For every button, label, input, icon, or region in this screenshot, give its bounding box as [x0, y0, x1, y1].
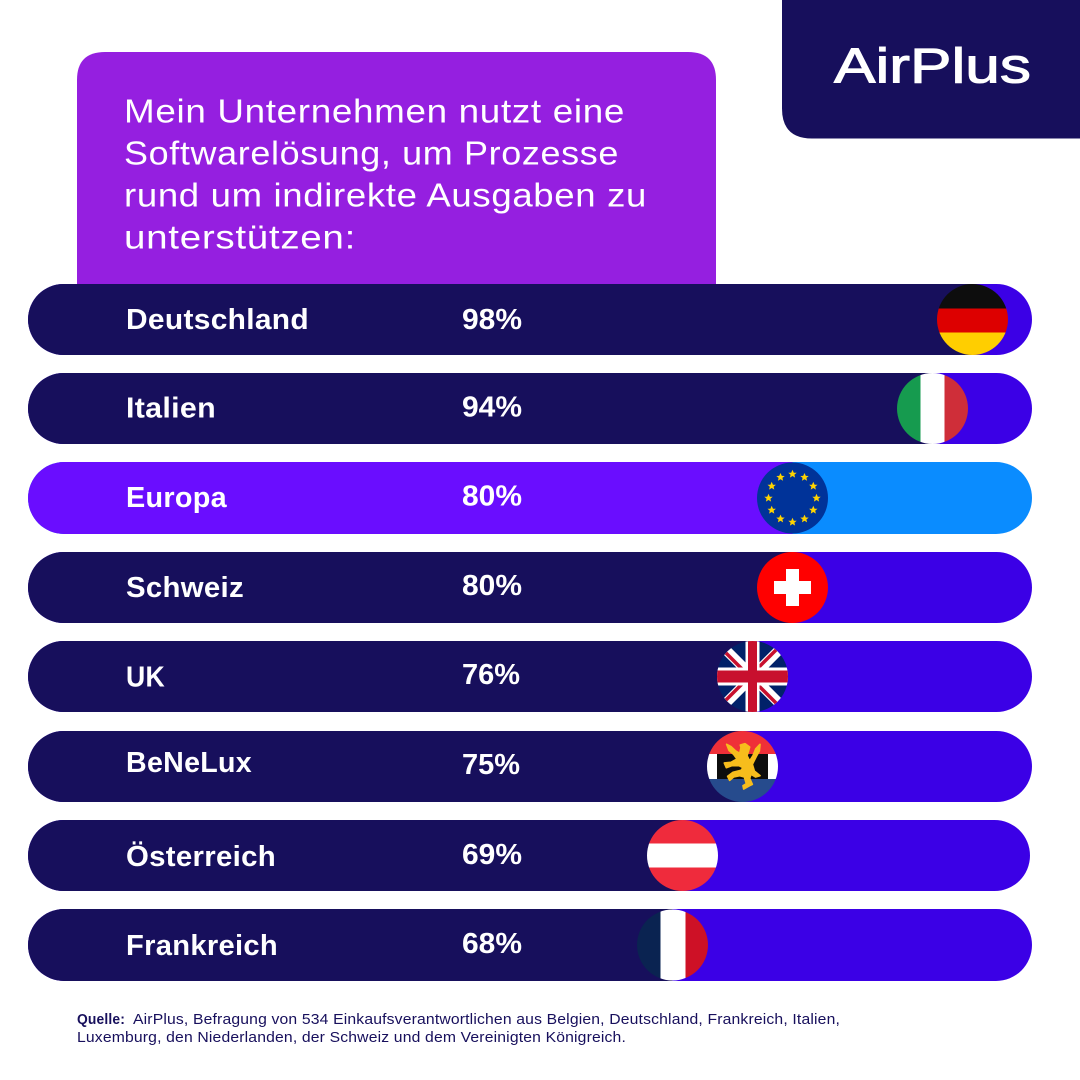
source note: Quelle:: [77, 1012, 125, 1028]
row: Österreich 69%: 69%: [462, 839, 522, 871]
row: UK 76%: [28, 640, 1032, 712]
source note: Luxemburg, den Niederlanden, der Schweiz und dem Vereinigten Königreich.: [77, 1030, 626, 1046]
row: Deutschland 98%: Deutschland: [126, 304, 309, 336]
title panel: [77, 52, 716, 284]
row: Frankreich 68%: 68%: [462, 928, 522, 960]
row: Schweiz 80%: [28, 552, 1032, 623]
title text: unterstützen:: [124, 218, 356, 256]
row: Frankreich 68%: Frankreich: [126, 930, 278, 962]
icon: UK flag: [716, 640, 788, 712]
icon: Italian flag: [896, 372, 968, 444]
row: BeNeLux 75%: [28, 730, 1032, 803]
title text: Softwarelösung, um Prozesse: [124, 134, 619, 172]
row: Österreich 69%: Österreich: [126, 840, 276, 873]
row: Italien 94%: [28, 372, 1032, 444]
title text: rund um indirekte Ausgaben zu: [124, 176, 647, 214]
icon: German flag: [936, 284, 1008, 356]
row: Europa 80%: [28, 462, 1032, 534]
row: UK 76%: UK: [126, 662, 165, 694]
row: UK 76%: 76%: [462, 659, 520, 691]
source note: [77, 1012, 840, 1046]
row: Österreich 69%: [28, 820, 1030, 892]
logo panel: [782, 0, 1080, 138]
icon: Swiss flag: [757, 552, 828, 623]
row: BeNeLux 75%: BeNeLux: [126, 747, 252, 779]
row: Schweiz 80%: Schweiz: [126, 572, 244, 604]
row: Italien 94%: Italien: [126, 392, 216, 424]
row: Schweiz 80%: 80%: [462, 570, 522, 602]
icon: BeNeLux flag: [706, 730, 778, 803]
row: BeNeLux 75%: 75%: [462, 749, 520, 781]
source note: AirPlus, Befragung von 534 Einkaufsverantwortlichen aus Belgien, Deutschland, Frankreich, Italien,: [133, 1012, 840, 1028]
row: Deutschland 98%: 98%: [462, 304, 522, 336]
icon: Austrian flag: [646, 820, 718, 892]
row: Italien 94%: 94%: [462, 392, 522, 424]
row: Frankreich 68%: [28, 909, 1032, 981]
row: Deutschland 98%: [28, 284, 1032, 356]
row: Europa 80%: 80%: [462, 480, 522, 512]
icon: French flag: [636, 909, 708, 981]
title text: Mein Unternehmen nutzt eine: [124, 92, 625, 130]
row: Europa 80%: Europa: [126, 482, 228, 514]
logo: AirPlus: AirPlus: [834, 40, 1031, 94]
title text: [124, 92, 647, 256]
icon: EU flag: [757, 462, 828, 534]
